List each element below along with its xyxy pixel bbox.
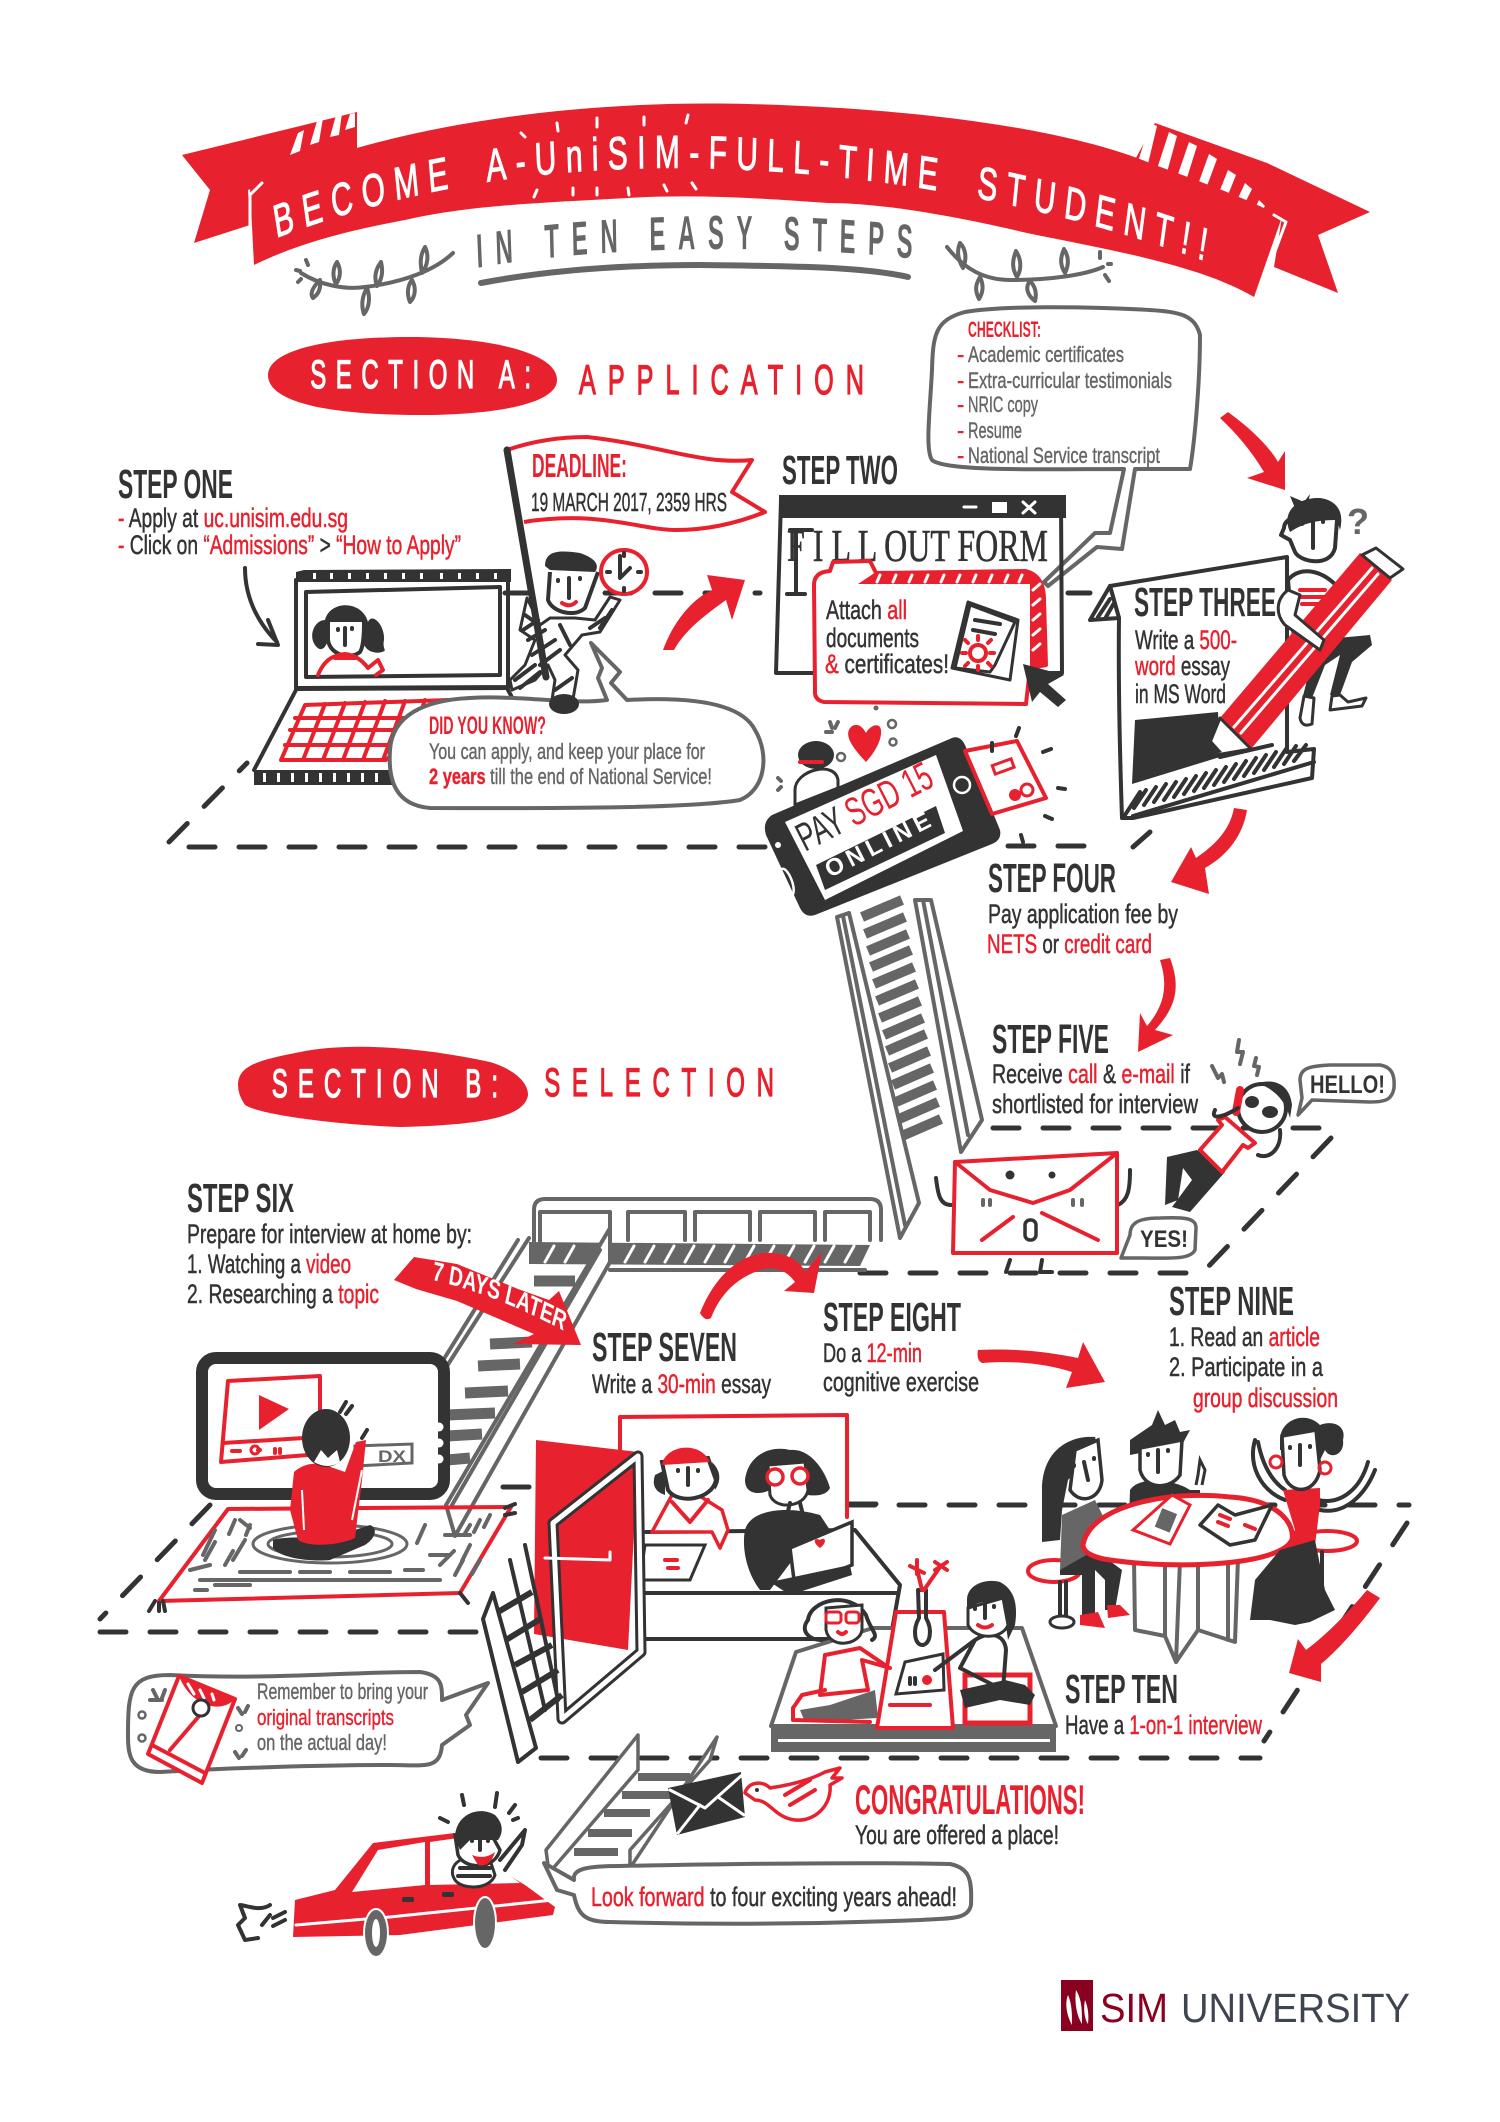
step seven text: STEP SEVEN: [592, 1324, 737, 1370]
discussion table with group: [1028, 1410, 1375, 1662]
person right: [1250, 1418, 1375, 1625]
checklist callout: NRIC copy: [968, 392, 1038, 417]
stage with interview: [771, 1560, 1056, 1752]
title text: BECOME A-UniSIM-FULL-TIME STUDENT!!: [273, 136, 1208, 260]
laurel right: [947, 243, 1111, 301]
interviewer on left: [793, 1600, 890, 1722]
black envelope with bird: [668, 1768, 842, 1835]
step six text: 1. Watching a video: [187, 1249, 351, 1279]
step three scroll: Write a 500-: [1135, 625, 1237, 655]
video screen: DX: [378, 1447, 407, 1466]
step nine text: 1. Read an article: [1169, 1322, 1320, 1352]
subtitle: in ten easy steps: IN TEN EASY STEPS: [477, 216, 912, 268]
arrow: step one to step two: [663, 575, 745, 650]
phone: pay SGD 15 online: ONLINE: [820, 807, 935, 883]
step four text: STEP FOUR: [988, 855, 1116, 901]
deadline flag: [507, 437, 765, 530]
arrow: step seven to step eight: [700, 1252, 822, 1319]
section B heading: SELECTION: [544, 1060, 774, 1104]
red folder: attach documents: [814, 561, 1046, 704]
step three scroll: word essay: [1134, 651, 1230, 681]
rug: [149, 1504, 515, 1611]
icon: documents: [952, 602, 1018, 680]
arrow: step three to step four: [1171, 808, 1247, 894]
step two heading: STEP TWO: [782, 447, 898, 493]
section A heading: APPLICATION: [579, 358, 864, 404]
bird: [745, 1768, 842, 1820]
red folder: attach documents: Attach all: [826, 595, 907, 625]
step nine text: group discussion: [1193, 1383, 1338, 1413]
red folder: attach documents: documents: [826, 623, 919, 653]
final ladder: [546, 1735, 717, 1873]
balcony and rail: [529, 1199, 881, 1270]
hello speech bubble: HELLO!: [1310, 1071, 1385, 1099]
phone: pay SGD 15 online: [765, 737, 1000, 916]
step one text: STEP ONE: [118, 461, 233, 507]
step six text: Prepare for interview at home by:: [187, 1219, 472, 1249]
laptop: [254, 569, 520, 785]
soldier with clock: [507, 450, 647, 714]
hello speech bubble: [1298, 1065, 1394, 1115]
step one text: [118, 461, 461, 560]
checklist callout: -: [957, 443, 964, 468]
video screen: [202, 1358, 444, 1494]
yes speech bubble: [1121, 1218, 1196, 1258]
look forward callout: [544, 1863, 971, 1924]
floor step five dashed outline: [860, 1128, 1336, 1273]
did you know callout: DID YOU KNOW?: [429, 712, 546, 740]
congratulations text: CONGRATULATIONS!: [855, 1776, 1085, 1823]
envelope character: [936, 1153, 1130, 1272]
checklist callout: -: [957, 342, 964, 367]
checklist callout: -: [957, 392, 964, 417]
checklist callout: -: [957, 418, 964, 443]
checklist callout: National Service transcript: [968, 443, 1160, 468]
icon: red document envelope: [138, 1676, 248, 1783]
step three scroll: [1090, 557, 1314, 818]
table top: [1083, 1495, 1292, 1565]
step eight text: STEP EIGHT: [823, 1294, 961, 1340]
checklist callout: Academic certificates: [968, 342, 1124, 367]
step seven text: [592, 1324, 771, 1399]
floor section B dashed outline: [100, 1487, 1409, 1758]
section A badge: [268, 337, 557, 415]
did you know callout: [390, 643, 763, 808]
driver: [440, 1793, 525, 1887]
woman on laptop screen: [312, 605, 385, 675]
cursor icon: [1023, 664, 1066, 707]
table panels: [1134, 1558, 1238, 1662]
step seven text: Write a 30-min essay: [592, 1369, 771, 1399]
envelope reminder callout: original transcripts: [257, 1705, 394, 1730]
person with giant pencil: [1204, 494, 1403, 757]
envelope reminder callout: [128, 1672, 488, 1783]
checklist callout: -: [957, 368, 964, 393]
checklist callout: Extra-curricular testimonials: [968, 368, 1172, 393]
deadline flag: DEADLINE:: [532, 447, 627, 484]
SIM University logo: UNIVERSITY: [1181, 1985, 1410, 2031]
step six text: 2. Researching a topic: [187, 1279, 379, 1309]
step five text: [992, 1016, 1198, 1119]
boy watching video: [273, 1402, 375, 1560]
arrow: step four to step five: [1138, 958, 1176, 1052]
SIM University logo: SIM: [1100, 1985, 1168, 2031]
section B badge: SECTION B:: [272, 1061, 498, 1105]
section A badge: SECTION A:: [310, 352, 531, 396]
ladder from phone to balcony: [837, 900, 982, 1238]
person with giant pencil: ?: [1347, 501, 1369, 542]
pencil: [1204, 548, 1403, 757]
envelope reminder callout: on the actual day!: [257, 1730, 387, 1755]
step four text: NETS or credit card: [987, 929, 1152, 959]
red door: [534, 1440, 641, 1719]
step nine text: 2. Participate in a: [1169, 1352, 1324, 1382]
step eight text: Do a 12-min: [823, 1338, 922, 1368]
SIM University logo: [1061, 1980, 1410, 2031]
arrow: step nine to step ten: [1289, 1590, 1380, 1682]
section B badge: [238, 1047, 528, 1127]
yes speech bubble: YES!: [1140, 1226, 1188, 1253]
man in the middle: [1128, 1410, 1205, 1550]
step four text: [987, 855, 1178, 959]
payment card: [965, 728, 1065, 842]
red car with driver: [238, 1793, 555, 1957]
step six text: STEP SIX: [187, 1175, 294, 1221]
banknote on table: [896, 1654, 944, 1694]
checklist callout: [928, 307, 1200, 586]
step eight text: [823, 1294, 979, 1397]
room wall with interviewers: [620, 1415, 900, 1639]
step three scroll: STEP THREE: [1134, 579, 1276, 625]
seven days later ribbon: 7 DAYS LATER: [434, 1262, 566, 1330]
stools: [1028, 1531, 1357, 1628]
browser window: fill out form: [776, 495, 1066, 673]
heart icon: [778, 706, 896, 790]
step nine text: STEP NINE: [1169, 1278, 1294, 1324]
look forward callout: Look forward to four exciting years ahead!: [591, 1882, 957, 1912]
person left: [1042, 1437, 1130, 1628]
step eight text: cognitive exercise: [823, 1367, 979, 1397]
step ten text: Have a 1-on-1 interview: [1065, 1710, 1262, 1740]
ladder from balcony to rug: [442, 1228, 610, 1536]
did you know callout: 2 years till the end of National Service!: [429, 764, 712, 789]
step ten text: STEP TEN: [1065, 1666, 1178, 1712]
phone: pay SGD 15 online: PAY SGD 15: [789, 754, 940, 860]
step five text: STEP FIVE: [992, 1016, 1109, 1062]
congratulations text: [855, 1776, 1085, 1850]
did you know callout: You can apply, and keep your place for: [429, 739, 705, 764]
floor A dashed outline: [169, 593, 1150, 847]
laurel left: [296, 247, 453, 314]
congratulations text: You are offered a place!: [855, 1820, 1059, 1850]
arrow: step one to laptop: [245, 568, 278, 645]
step one text: - Apply at uc.unisim.edu.sg: [118, 503, 348, 533]
step five text: shortlisted for interview: [992, 1089, 1198, 1119]
interviewee on right: [935, 1581, 1035, 1723]
step ten text: [1065, 1666, 1262, 1740]
interviewer with glasses: [744, 1449, 852, 1595]
ladder from door to stage: [483, 1545, 562, 1762]
title banner: [182, 104, 1370, 297]
browser window: fill out form: F I L L OUT FORM: [787, 520, 1048, 571]
step three scroll: in MS Word: [1135, 679, 1226, 709]
deadline flag: 19 MARCH 2017, 2359 HRS: [531, 487, 727, 517]
vase with flowers: [910, 1560, 947, 1645]
interviewer with headband: [640, 1448, 728, 1580]
seven days later ribbon: [394, 1257, 581, 1345]
red folder: attach documents: & certificates!: [825, 649, 949, 679]
step one text: - Click on “Admissions” > “How to Apply”: [118, 530, 461, 560]
girl behind phone: [795, 741, 838, 805]
arrow: step eight to step nine: [978, 1342, 1105, 1388]
arrow: to step three: [1220, 412, 1285, 490]
step four text: Pay application fee by: [988, 899, 1178, 929]
step five text: Receive call & e-mail if: [992, 1059, 1190, 1089]
checklist callout: Resume: [968, 418, 1022, 443]
step nine text: [1169, 1278, 1338, 1413]
envelope reminder callout: Remember to bring your: [257, 1679, 428, 1704]
step six text: [187, 1175, 472, 1309]
checklist callout: CHECKLIST:: [968, 317, 1041, 342]
person lying with phone: [1165, 1040, 1292, 1212]
